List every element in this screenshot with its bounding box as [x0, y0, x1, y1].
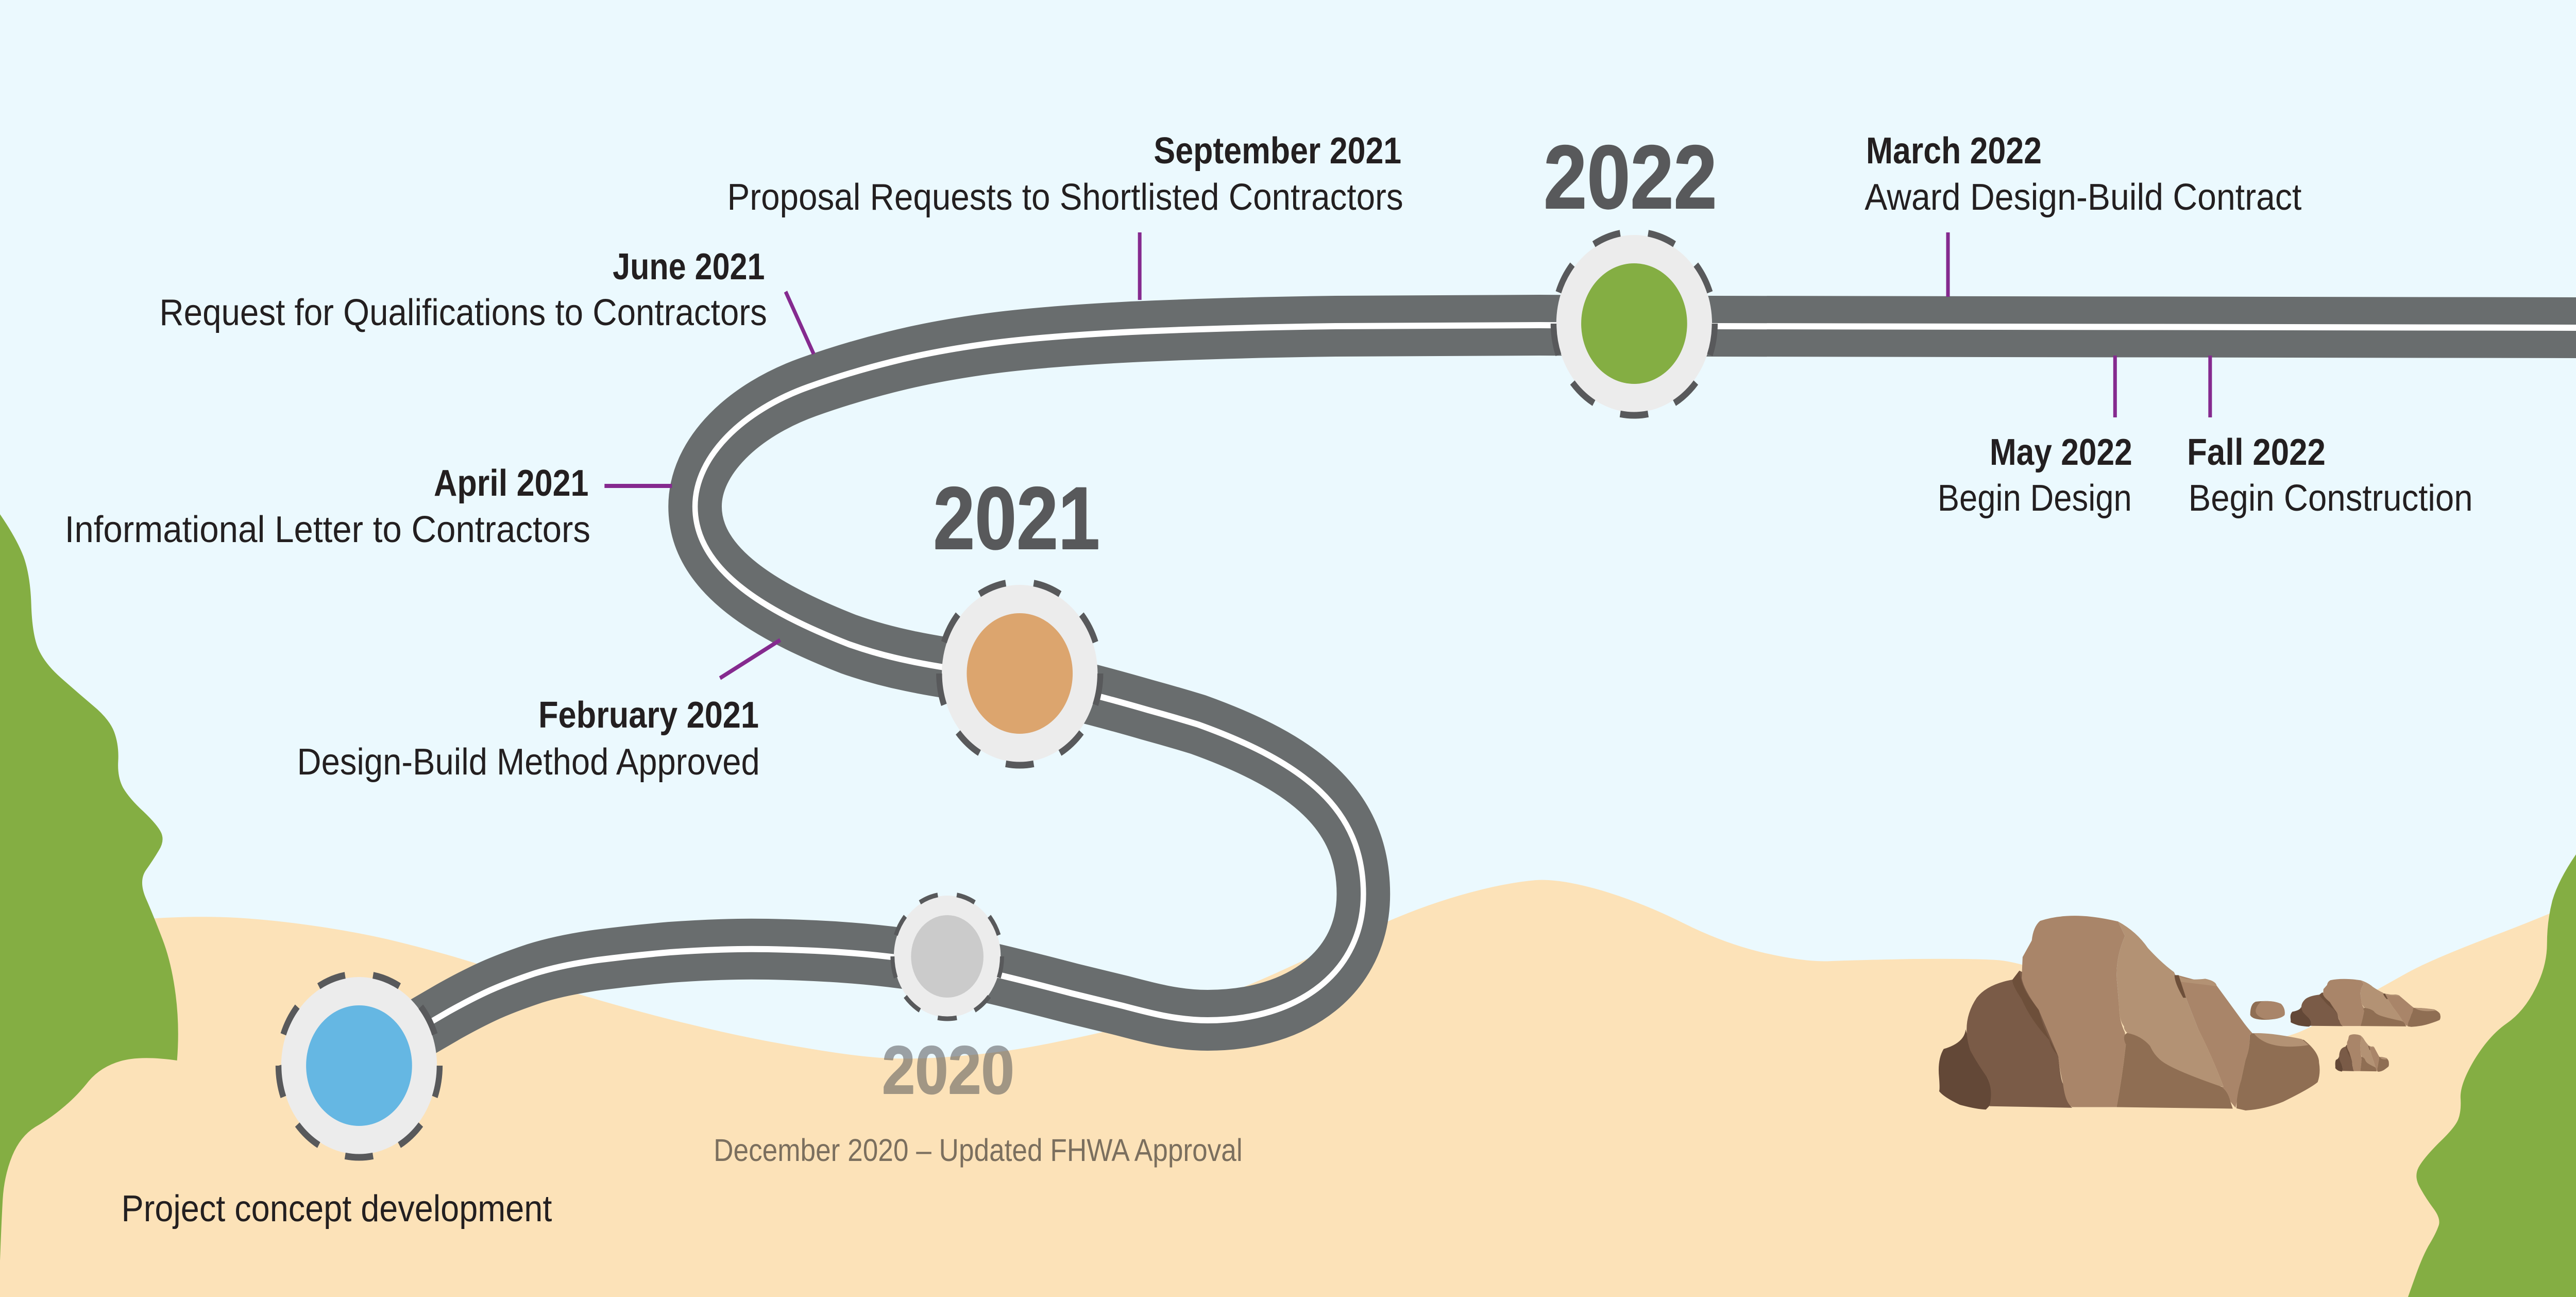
- milestone: project start (blue): [279, 974, 439, 1157]
- small pebble: [2250, 1001, 2285, 1020]
- label: June 2021: June 2021: [613, 246, 765, 288]
- label: May 2022: [1938, 432, 2132, 519]
- label: Fall 2022: Fall 2022: [2187, 432, 2326, 473]
- label: September 2021: Proposal Requests to Shortlisted Contractors: [727, 177, 1403, 218]
- left bush: [0, 514, 178, 1261]
- year heading 2022: 2022: [1544, 127, 1717, 227]
- year heading 2021: 2021: [933, 469, 1100, 568]
- label: April 2021: Informational Letter to Contractors: [65, 509, 590, 550]
- milestone: 2020 (gray): [892, 894, 1002, 1019]
- label: September 2021: [727, 130, 1403, 218]
- milestone: 2022 (green): [1553, 232, 1715, 415]
- label: April 2021: [65, 463, 590, 550]
- large rock: [1939, 916, 2320, 1110]
- label: February 2021: February 2021: [538, 695, 759, 736]
- year heading 2020: 2020: [882, 1033, 1014, 1108]
- label: September 2021: September 2021: [1154, 130, 1401, 172]
- sand ground: [0, 880, 2576, 1297]
- label: June 2021: Request for Qualifications to Contractors: [159, 292, 767, 333]
- label: February 2021: [297, 695, 760, 783]
- rocks: [1939, 916, 2441, 1110]
- milestone: 2021 (orange): [939, 582, 1100, 765]
- label: March 2022: March 2022: [1866, 130, 2042, 172]
- medium rock: [2291, 979, 2441, 1027]
- label: Fall 2022: [2187, 432, 2473, 519]
- label: project concept development: Project concept development: [122, 1188, 552, 1229]
- label: February 2021: Design-Build Method Approved: [297, 742, 760, 783]
- purple connector lines: [604, 232, 2210, 678]
- label: June 2021: [159, 246, 767, 333]
- label: April 2021: April 2021: [434, 463, 589, 504]
- label: March 2022: [1865, 130, 2302, 218]
- label: May 2022: May 2022: [1990, 432, 2132, 473]
- small rock: [2335, 1034, 2389, 1072]
- label: Fall 2022: Begin Construction: [2189, 478, 2473, 519]
- label: December 2020 approval: December 2020 – Updated FHWA Approval: [714, 1133, 1243, 1168]
- right bush: [2408, 854, 2576, 1297]
- label: March 2022: Award Design-Build Contract: [1865, 177, 2302, 218]
- label: May 2022: Begin Design: [1938, 478, 2132, 519]
- winding road: [389, 325, 2576, 1046]
